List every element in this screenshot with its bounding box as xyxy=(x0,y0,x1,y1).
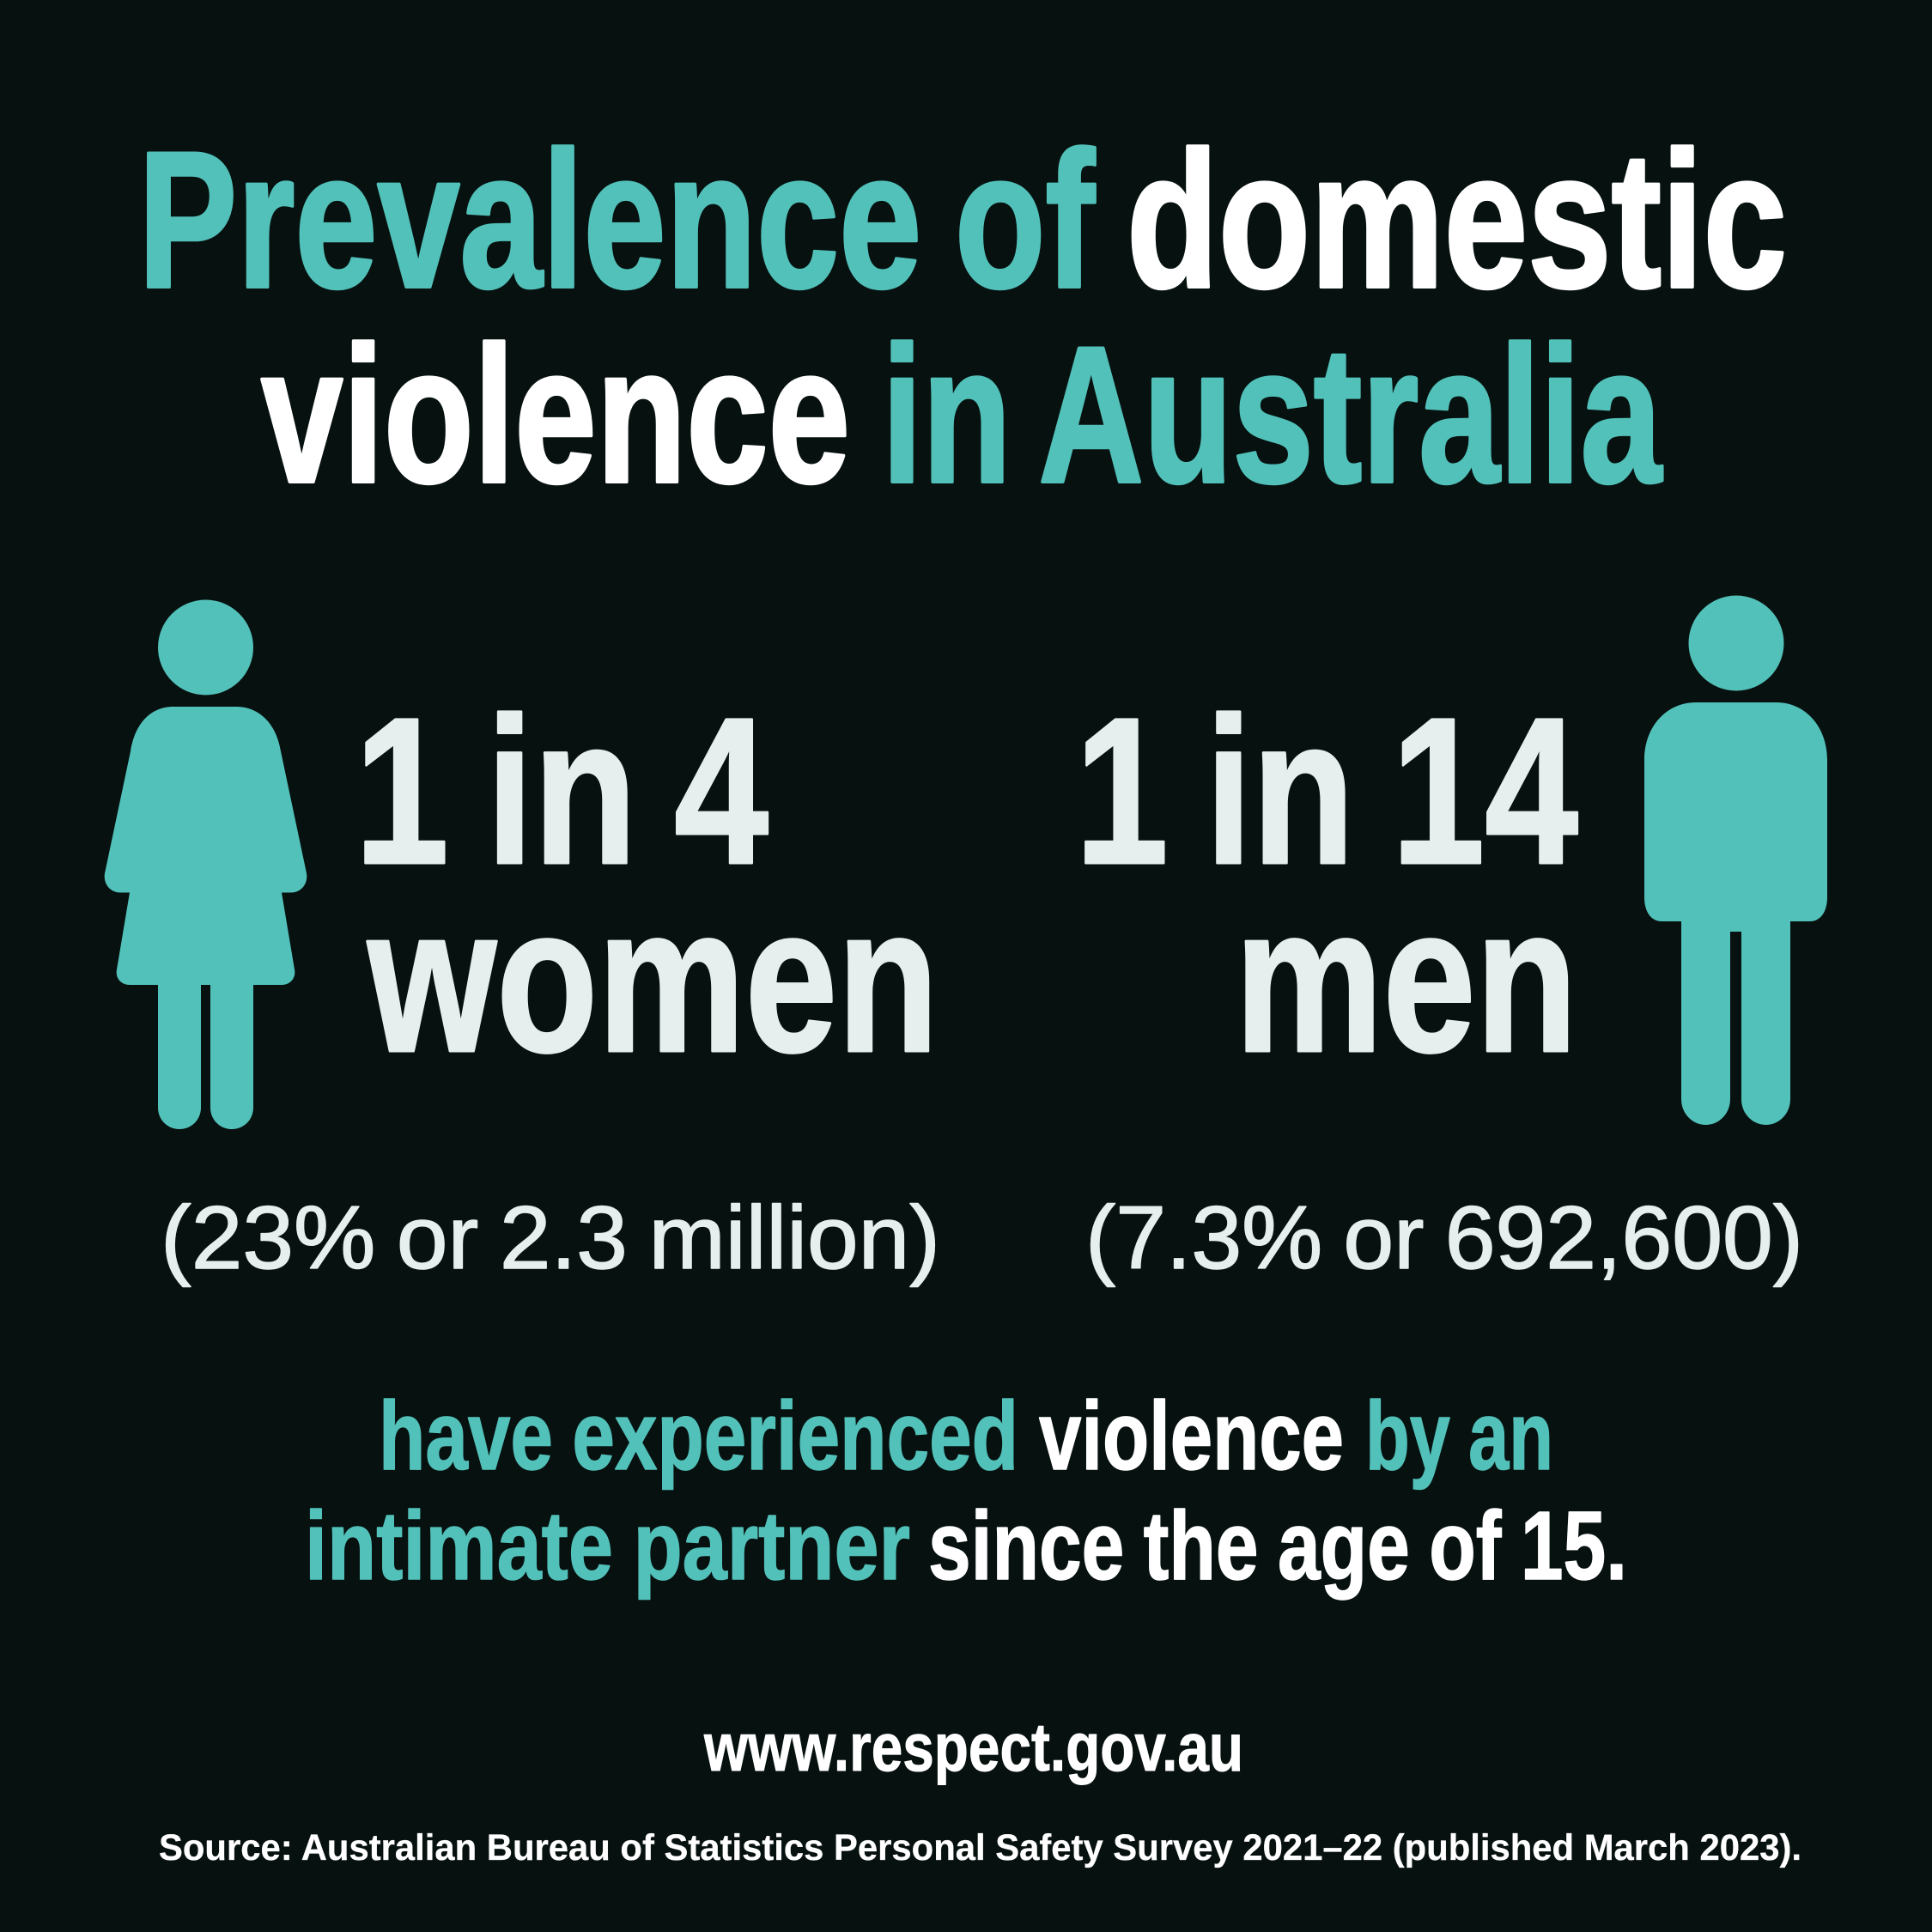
title: Prevalence of xyxy=(138,111,1096,328)
icon: woman xyxy=(105,599,307,1129)
stat: 1 in 4 women: 1 in 4 xyxy=(355,675,769,908)
stat: 1 in 4 women: women xyxy=(367,864,939,1096)
title xyxy=(138,111,1787,523)
title: in Australia xyxy=(882,306,1663,523)
text: women figure: (23% or 2.3 million) xyxy=(161,1188,940,1288)
text: description xyxy=(305,1382,1627,1600)
text: men figure: (7.3% or 692,600) xyxy=(1085,1188,1803,1288)
stat: 1 in 14 men: 1 in 14 xyxy=(1075,675,1578,908)
stat: 1 in 14 men: men xyxy=(1235,864,1577,1096)
text: description: have experienced xyxy=(379,1382,1018,1490)
text: description: intimate partner xyxy=(305,1492,910,1600)
icon: man xyxy=(1644,596,1827,1125)
text: description: violence xyxy=(1039,1382,1344,1490)
text: description: since the age of 15. xyxy=(928,1492,1627,1600)
text: website: www.respect.gov.au xyxy=(703,1709,1243,1785)
title: violence xyxy=(261,306,850,523)
stat: 1 in 4 women xyxy=(355,675,939,1096)
text: description: by an xyxy=(1365,1382,1553,1490)
text: source: Source: Australian Bureau of Statistics Personal Safety Survey 2021–22 (published March 2023). xyxy=(159,1827,1801,1868)
stat: 1 in 14 men xyxy=(1075,675,1578,1096)
